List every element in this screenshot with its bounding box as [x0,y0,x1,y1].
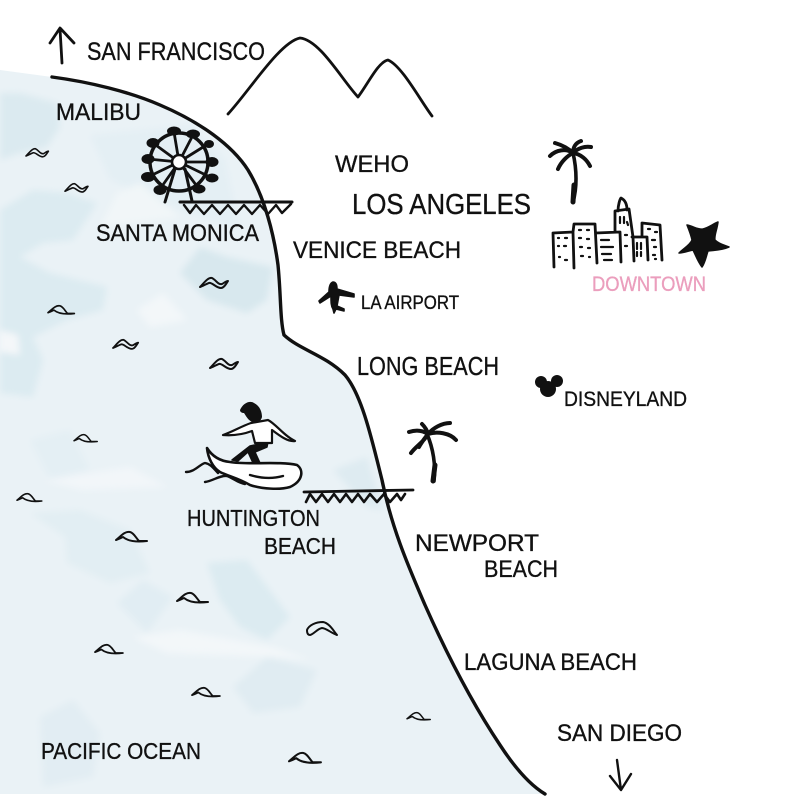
label: Newport Beach: NEWPORT [415,530,539,557]
icon: airplane [319,282,354,313]
icon: Huntington pier [304,490,413,502]
label: Huntington Beach [187,505,336,559]
label: WeHo: WEHO [335,151,409,178]
label: Santa Monica: SANTA MONICA [96,220,259,247]
mountains [228,38,432,116]
icon: surfer [186,402,301,489]
label: Newport Beach: BEACH [484,556,558,583]
waves [17,149,430,763]
label: Venice Beach: VENICE BEACH [293,237,461,264]
label: Huntington Beach: BEACH [264,533,336,559]
icon: Santa Monica pier [180,202,292,214]
label: Laguna Beach: LAGUNA BEACH [464,649,637,676]
label: San Diego: SAN DIEGO [557,720,682,747]
label: Disneyland: DISNEYLAND [564,388,687,411]
icon: downtown skyline [553,198,662,268]
arrow: north to San Francisco [50,28,74,63]
label: Downtown: DOWNTOWN [592,273,706,296]
label: Huntington Beach: HUNTINGTON [187,505,320,531]
icon: palm tree upper [550,141,591,202]
coastline [52,77,545,794]
label: Pacific Ocean: PACIFIC OCEAN [41,738,201,764]
label: Los Angeles: LOS ANGELES [352,189,531,221]
label: Newport Beach [415,530,558,583]
label: San Francisco: SAN FRANCISCO [87,38,265,66]
ocean watercolor wash [0,60,560,800]
label: Malibu: MALIBU [56,99,141,126]
icon: Mickey ears [535,375,563,397]
icon: palm tree lower [409,423,456,481]
icon: ferris wheel [141,126,218,202]
arrow: south to San Diego [610,760,631,790]
label: LA Airport: LA AIRPORT [361,293,459,314]
label: Long Beach: LONG BEACH [357,351,499,381]
icon: star [679,222,729,267]
